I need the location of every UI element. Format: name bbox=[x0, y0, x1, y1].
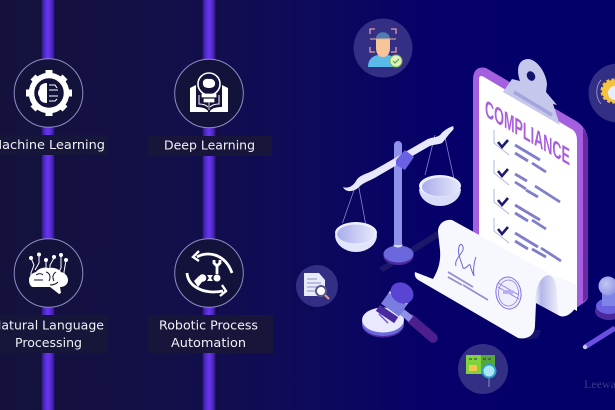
checklist bbox=[494, 130, 561, 261]
beam bbox=[343, 126, 454, 191]
seal stamp bbox=[494, 275, 523, 311]
shadow under scroll bbox=[526, 330, 541, 340]
icon: light bulb on open book bbox=[175, 59, 243, 128]
left pan bbox=[335, 183, 377, 252]
clipboard board bbox=[473, 68, 588, 310]
gavel head bbox=[383, 278, 418, 319]
label: Deep Learning: Deep Learning bbox=[164, 138, 255, 152]
card: Deep Learning bbox=[148, 59, 272, 156]
clipboard clip bbox=[503, 59, 560, 125]
bubble: document search bbox=[296, 265, 338, 307]
scroll fold bbox=[535, 275, 560, 316]
card: Natural Language Processing bbox=[0, 239, 108, 353]
pen bbox=[583, 328, 615, 349]
clipboard bbox=[473, 59, 588, 311]
desk stamp bbox=[595, 276, 615, 320]
label: Natural Language Processing bbox=[0, 315, 108, 353]
bubble: gear process bbox=[588, 64, 615, 122]
label: Natural Language Processing: Processing bbox=[15, 335, 82, 350]
vertical bar right bbox=[202, 0, 216, 410]
bubble: card with magnifier bbox=[458, 344, 508, 394]
paper sheet bbox=[479, 76, 577, 311]
label: Robotic Process Automation bbox=[148, 315, 273, 353]
gavel block bbox=[362, 308, 404, 338]
icon: brain with circuit nodes bbox=[14, 239, 83, 307]
signature lines bbox=[448, 272, 488, 300]
gavel handle bbox=[411, 319, 433, 338]
scale pole bbox=[394, 141, 402, 245]
card: Machine Learning bbox=[0, 59, 108, 155]
scales of justice bbox=[335, 126, 461, 265]
icon: gear with brain bbox=[14, 59, 83, 127]
signature bbox=[456, 244, 476, 276]
scale base bbox=[384, 242, 414, 265]
shadow below scales bbox=[379, 231, 439, 272]
card: Robotic Process Automation bbox=[148, 239, 273, 353]
board edge bbox=[583, 128, 588, 302]
icon: robot arm in cycle arrows bbox=[175, 239, 243, 307]
label: Robotic Process Automation: Robotic Process bbox=[159, 318, 258, 332]
right pan bbox=[419, 133, 461, 206]
scroll sheet bbox=[415, 220, 577, 338]
label: Robotic Process Automation: Automation bbox=[171, 335, 246, 350]
vertical bar left bbox=[40, 0, 56, 410]
bubble: face recognition bbox=[354, 18, 412, 78]
scroll document bbox=[415, 220, 577, 338]
beam clasp bbox=[396, 150, 414, 170]
gavel bbox=[362, 278, 433, 338]
